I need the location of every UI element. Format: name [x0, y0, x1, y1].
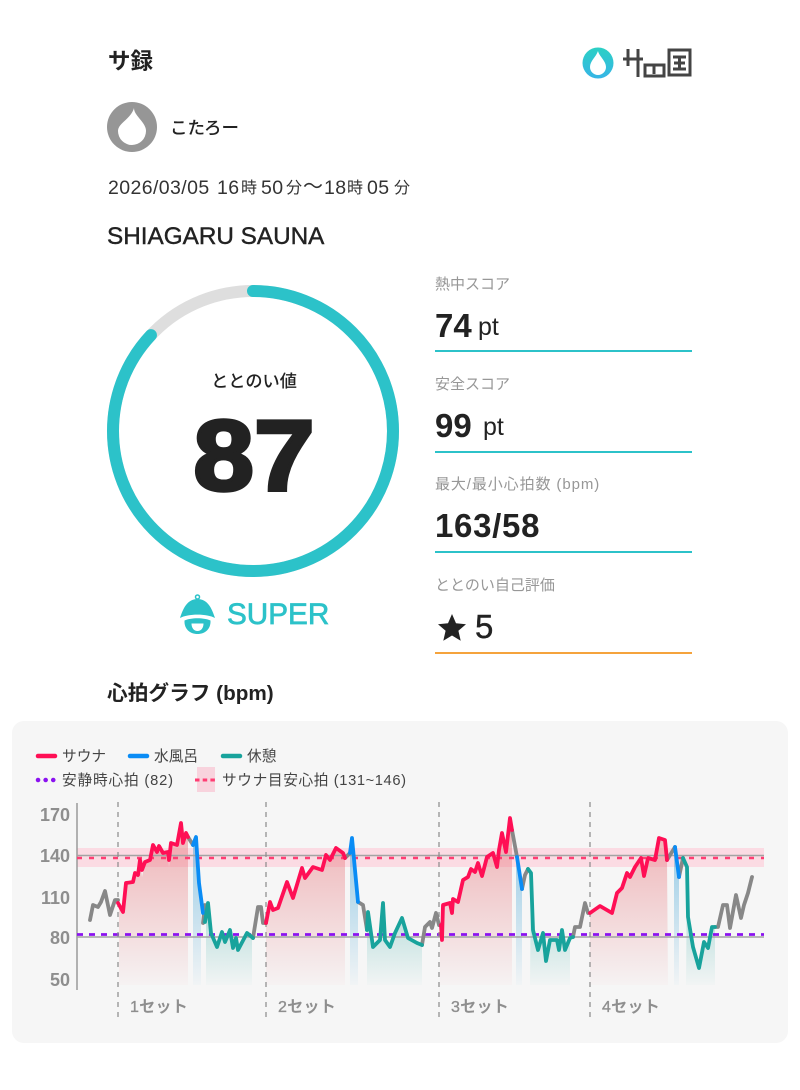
legend: rest: [223, 747, 277, 765]
line: rest segments: [205, 858, 715, 968]
stat: safety score: pt: [483, 413, 504, 441]
stat: max/min heart rate: 163/58: [435, 507, 540, 544]
date and time: 50: [261, 177, 284, 199]
title: サ録: [108, 49, 153, 74]
panel: heart rate chart: [12, 721, 788, 1043]
logo: sauna no kuni: [582, 48, 692, 78]
legend: cold bath: [130, 748, 198, 765]
set labels: 3セット: [451, 999, 509, 1016]
date and time: 時: [347, 179, 363, 197]
date and time: ～: [303, 176, 323, 198]
icon: user avatar: [107, 102, 157, 152]
legend: sauna: [38, 748, 106, 765]
date and time: 05: [367, 177, 390, 199]
y axis labels: 110: [41, 888, 70, 908]
set labels: 4セット: [602, 999, 660, 1016]
date and time: 18: [324, 177, 346, 199]
area fills: [119, 818, 715, 985]
icon: sauna hat mascot: [180, 594, 215, 634]
chart svg: [36, 747, 764, 1017]
date and time: 16: [217, 177, 240, 199]
legend: resting heart rate: 安静時心拍 (82): [62, 772, 173, 789]
line: cold bath segments: [193, 837, 679, 913]
line: transition segments: [90, 830, 752, 945]
legend: sauna target heart rate: [195, 767, 406, 792]
reference lines: [77, 856, 764, 937]
set labels: 2セット: [278, 999, 336, 1016]
rating label: SUPER: [227, 598, 329, 631]
date and time: 2026/03/05: [108, 177, 210, 199]
gauge: totonoi value: 87: [193, 400, 315, 512]
stat: self rating: ととのい自己評価: [435, 577, 555, 594]
y axis labels: 170: [40, 805, 70, 825]
stat: heat score: 74: [435, 307, 472, 344]
legend: rest: 休憩: [247, 747, 277, 765]
legend: sauna: サウナ: [62, 748, 106, 765]
y axis labels: 50: [50, 970, 70, 990]
line: sauna segments: [118, 818, 667, 940]
stat: safety score: 99: [435, 407, 472, 444]
legend: sauna target heart rate: サウナ目安心拍 (131~146): [222, 772, 406, 789]
target band: [77, 848, 764, 867]
user name: こたろー: [170, 118, 239, 138]
stat: heat score: 熱中スコア: [435, 276, 510, 293]
y axis labels: [40, 805, 70, 990]
set labels: [130, 999, 660, 1016]
date and time: 時: [241, 179, 257, 197]
heart rate line: [90, 818, 752, 968]
legend: cold bath: 水風呂: [154, 748, 198, 765]
facility name: SHIAGARU SAUNA: [107, 223, 324, 250]
date and time: 分: [394, 179, 410, 197]
y axis labels: 80: [50, 928, 70, 948]
y axis labels: 140: [40, 846, 70, 866]
set labels: 1セット: [130, 999, 188, 1016]
date and time: 分: [286, 179, 302, 197]
y axis: [76, 803, 78, 990]
stat: max/min heart rate: [435, 476, 692, 553]
stat: heat score: pt: [478, 313, 499, 341]
set dividers: [118, 802, 590, 1020]
gauge: totonoi value: [107, 285, 399, 577]
stat: max/min heart rate: 最大/最小心拍数 (bpm): [435, 476, 600, 493]
stat: self rating: 5: [475, 608, 493, 645]
gauge: totonoi value: ととのい値: [211, 371, 297, 391]
stat: heat score: [435, 276, 692, 352]
date and time: [108, 176, 410, 199]
chart heading: 心拍グラフ (bpm): [107, 682, 274, 705]
stat: safety score: 安全スコア: [435, 376, 510, 393]
stat: safety score: [435, 376, 692, 453]
legend: [38, 747, 406, 792]
stat: self rating: [435, 577, 692, 654]
